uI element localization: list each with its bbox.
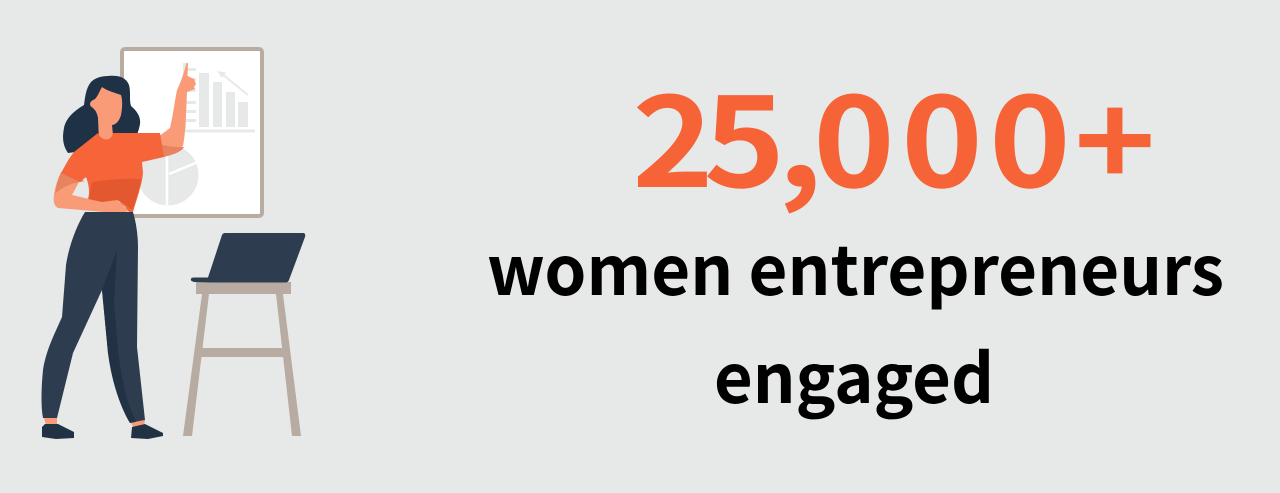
left shoe bbox=[42, 424, 74, 439]
face and neck bbox=[90, 87, 122, 143]
headline number: 25,000+ bbox=[632, 43, 1156, 223]
trouser shadow bbox=[102, 250, 136, 423]
navy trousers bbox=[42, 212, 145, 423]
subtitle line 2: engaged bbox=[714, 324, 994, 423]
lower arm and hand bbox=[54, 172, 129, 213]
raised arm with pointing finger bbox=[158, 63, 196, 157]
icon: stool bbox=[183, 282, 301, 436]
right shoe bbox=[131, 424, 163, 439]
icon: whiteboard with charts bbox=[122, 49, 262, 216]
shirt shadow bbox=[89, 179, 141, 210]
sleeve shadow on lower arm bbox=[55, 173, 85, 194]
orange shirt bbox=[61, 133, 164, 212]
bar chart on whiteboard bbox=[183, 63, 255, 132]
icon: laptop bbox=[191, 233, 305, 282]
subtitle line 1: women entrepreneurs bbox=[487, 216, 1224, 315]
pie chart on whiteboard bbox=[138, 144, 198, 206]
icon: woman presenting bbox=[42, 63, 196, 439]
sleeve shadow on raised arm bbox=[160, 144, 184, 157]
hair bbox=[63, 76, 140, 153]
ankles bbox=[44, 418, 145, 428]
